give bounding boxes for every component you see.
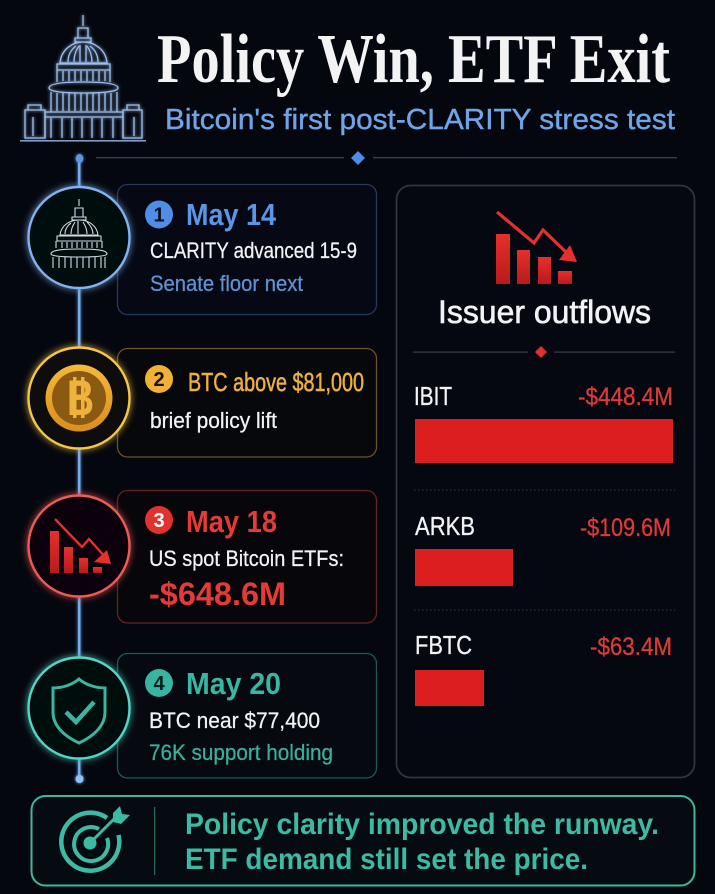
heading divider <box>413 346 675 358</box>
row: IBIT: -$448.4M <box>578 383 673 411</box>
timeline spine <box>76 154 84 783</box>
date: May 18 <box>186 504 277 539</box>
event text: brief policy lift <box>150 408 277 433</box>
event text: US spot Bitcoin ETFs: <box>149 546 344 571</box>
event text: CLARITY advanced 15-9 <box>150 238 357 263</box>
icon: capitol building header <box>25 15 142 138</box>
icon: shield check <box>53 679 105 743</box>
row: ARKB <box>415 513 671 586</box>
total outflow: -$648.6M <box>149 576 286 612</box>
row: FBTC: -$63.4M <box>590 633 672 661</box>
callout: takeaway <box>32 796 694 886</box>
row: IBIT <box>414 383 673 463</box>
panel: issuer outflows <box>396 186 694 778</box>
badge 3: 3 <box>153 510 165 532</box>
row: FBTC <box>415 632 672 706</box>
event text: BTC near $77,400 <box>149 708 320 733</box>
card 2 <box>118 348 376 457</box>
badge 3 <box>145 506 173 534</box>
date: May 20 <box>186 666 281 701</box>
badge 4 <box>145 669 173 697</box>
badge 1 <box>145 200 173 228</box>
row: FBTC: FBTC <box>415 632 472 660</box>
headline: BTC above $81,000 <box>188 367 364 397</box>
subtitle: Bitcoin's first post-CLARITY stress test <box>165 104 675 136</box>
node 3: falling chart <box>28 496 130 596</box>
base line of capitol <box>20 140 146 142</box>
icon: falling bars <box>50 519 111 573</box>
row: ARKB: -$109.6M <box>580 514 671 542</box>
card 3 <box>118 490 376 623</box>
takeaway text: ETF demand still set the price. <box>185 843 588 876</box>
icon: bitcoin coin: B <box>67 370 94 426</box>
takeaway text: Policy clarity improved the runway. <box>185 808 659 841</box>
row: ARKB: ARKB <box>415 513 475 541</box>
icon: target and arrow <box>61 806 130 871</box>
card 4 <box>118 654 376 778</box>
date: May 14 <box>186 197 277 232</box>
badge 4: 4 <box>153 673 165 695</box>
node 2: bitcoin <box>28 348 130 448</box>
icon: capitol <box>51 199 107 268</box>
icon: falling bars <box>496 212 577 284</box>
node 1: capitol <box>28 187 130 288</box>
badge 2 <box>145 365 173 393</box>
panel heading: Issuer outflows <box>438 294 651 330</box>
node 4: shield <box>28 658 130 758</box>
note: Senate floor next <box>150 271 303 296</box>
note: 76K support holding <box>149 740 333 765</box>
badge 1: 1 <box>153 204 165 226</box>
row: IBIT: IBIT <box>414 383 452 411</box>
header divider <box>96 151 677 165</box>
card 1 <box>118 184 376 314</box>
badge 2: 2 <box>153 369 165 391</box>
takeaway text <box>185 808 659 876</box>
